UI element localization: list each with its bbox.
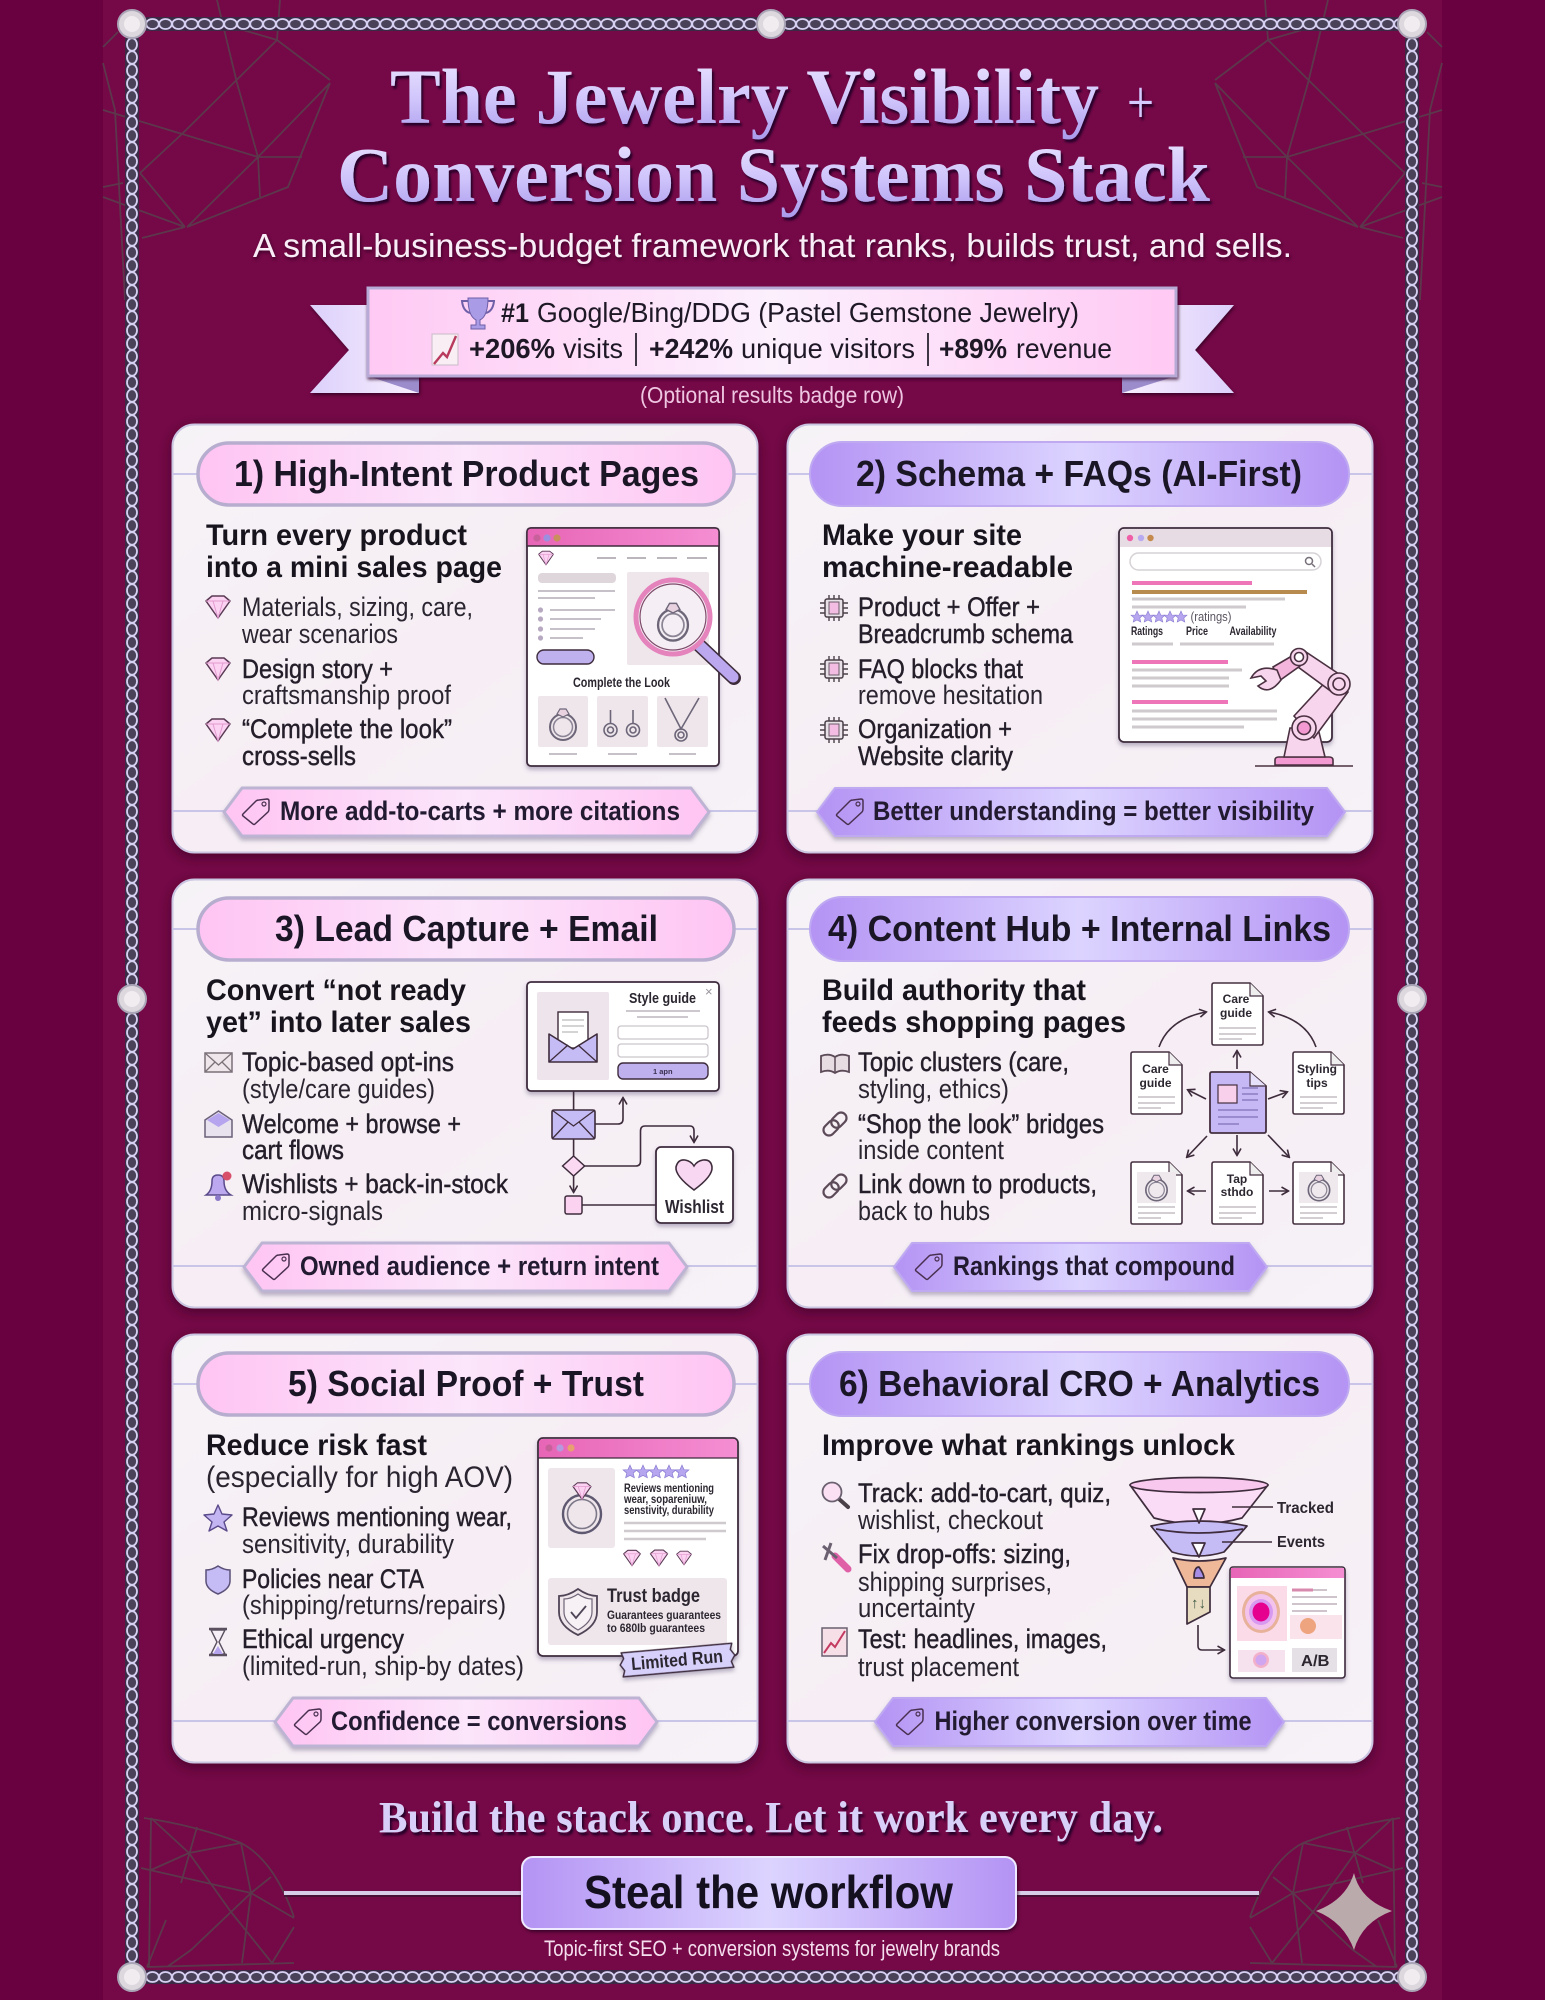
popup: 1 apn [653,1067,673,1076]
banner line 2: +89% [939,333,1007,364]
bullet list: Welcome + browse + [242,1109,461,1139]
illustration: search result with robot arm [1119,528,1353,766]
bullet list: back to hubs [858,1196,990,1226]
closing line: Build the stack once. Let it work every day. [379,1793,1163,1842]
left document [1131,1052,1182,1114]
left document: Care [1142,1062,1169,1076]
panel 4: Content Hub + Internal Links [787,880,1373,1308]
banner line 2 [469,333,1112,366]
subheading: into a mini sales page [206,551,502,584]
bullet list: cross-sells [242,741,356,771]
bullet list: Link down to products, [858,1169,1097,1199]
tagline: Topic-first SEO + conversion systems for jewelry brands [544,1936,1000,1961]
illustration: review page: wear, sopareniuw, [623,1492,707,1506]
icon: star [204,1505,232,1531]
heading pill [198,443,734,505]
subheading [822,974,1126,1039]
icon: open mail [205,1111,232,1137]
subheading [206,974,471,1039]
bullet list: (style/care guides) [242,1074,435,1104]
tag pill [894,1243,1267,1291]
banner line 1: Google/Bing/DDG (Pastel Gemstone Jewelry) [537,297,1079,328]
bullet list: wear scenarios [241,619,398,649]
tag pill [817,788,1345,836]
bullet list: “Shop the look” bridges [858,1109,1104,1139]
subtitle: A small-business-budget framework that ranks, builds trust, and sells. [253,227,1292,264]
subheading: Reduce risk fast [206,1429,427,1462]
button rules [284,1893,1259,1896]
illustration: search result with robot arm: Ratings [1131,626,1163,638]
panel 5: Social Proof + Trust [172,1334,758,1762]
bullet list: sensitivity, durability [242,1529,454,1559]
bullet list: Test: headlines, images, [858,1624,1107,1654]
icon: shield [206,1566,230,1594]
illustration: review page [538,1438,738,1677]
trust badge box: Guarantees guarantees [607,1610,721,1622]
gem facet pattern: bottom left [141,1818,294,1967]
heading pill [810,442,1349,506]
illustration: review page: senstivity, durability [624,1503,714,1517]
bullet list [206,592,473,771]
bullet list: shipping surprises, [858,1567,1052,1597]
funnel labels: Tracked [1277,1500,1334,1517]
illustration: funnel and heatmap: ↑↓ [1191,1595,1206,1612]
icon: mail [205,1053,232,1072]
subheading: yet” into later sales [206,1006,471,1039]
subheading: (especially for high AOV) [206,1461,513,1494]
bullet list: Topic clusters (care, [858,1047,1069,1077]
heading pill: 5) Social Proof + Trust [288,1363,644,1404]
bullet list: micro-signals [242,1196,383,1226]
heatmap browser [1230,1567,1345,1678]
decision diamond [563,1156,585,1176]
popup [527,982,719,1091]
left document: guide [1140,1076,1172,1090]
illustration: search result with robot arm: Availability [1230,626,1277,638]
results ribbon banner [310,288,1234,393]
gem facet pattern: top right [1215,0,1442,300]
bullet list: inside content [858,1135,1004,1165]
CTA button: Steal the workflow [584,1866,953,1918]
subheading: feeds shopping pages [822,1006,1126,1039]
panel 1: High-Intent Product Pages [172,424,758,852]
subheading [206,519,502,584]
icon: hourglass [209,1629,227,1655]
bullet list: Ethical urgency [242,1624,404,1654]
icon: magnifier [822,1482,848,1507]
heatmap browser: A/B [1301,1653,1330,1670]
bottom documents: sthdo [1221,1185,1253,1199]
bullet list: FAQ blocks that [858,654,1023,684]
bullet list: (limited-run, ship-by dates) [242,1651,524,1681]
bullet list [822,1478,1111,1682]
icon: trophy [462,298,494,329]
illustration: search result with robot arm: (ratings) [1190,610,1232,624]
tag pill: Rankings that compound [953,1251,1235,1281]
panel 2: Schema + FAQs [787,424,1373,852]
icon: tools [823,1543,848,1569]
subheading: Convert “not ready [206,974,467,1007]
top document: Care [1223,992,1250,1006]
bullet list [821,1047,1104,1226]
illustration: search result with robot arm: Price [1186,626,1208,638]
bottom documents [1131,1162,1344,1224]
icon: sparkle [1316,1873,1392,1950]
popup: Style guide [629,990,696,1007]
bullet list: styling, ethics) [858,1074,1009,1104]
heading pill [198,898,734,960]
link arrows [1159,1012,1316,1191]
tag pill [244,1243,687,1291]
tag pill: Better understanding = better visibility [873,796,1314,826]
ribbon tails [310,305,1234,393]
CTA button [522,1857,1016,1929]
banner line 2: unique visitors [741,333,915,364]
heading pill: 3) Lead Capture + Email [275,908,658,949]
bullet list: “Complete the look” [242,714,452,744]
bullet list [820,592,1074,771]
heading pill: 6) Behavioral CRO + Analytics [839,1363,1320,1404]
bullet list [204,1502,524,1681]
heading pill [198,1353,734,1415]
hub document [1210,1072,1266,1133]
tag pill [275,1698,657,1746]
bullet list: Website clarity [858,741,1013,771]
heading pill: 4) Content Hub + Internal Links [828,908,1331,949]
tag pill [224,788,709,836]
tag pill: Higher conversion over time [934,1706,1252,1736]
subheading: machine-readable [822,551,1073,584]
illustration: content hub diagram [1131,983,1344,1224]
limited run badge: Limited Run [630,1646,724,1674]
bullet list: uncertainty [858,1593,975,1623]
bullet list: trust placement [858,1652,1019,1682]
illustration: product page browser: Complete the Look [573,675,670,690]
heading pill: 2) Schema + FAQs (AI-First) [856,453,1302,494]
top document: guide [1220,1006,1252,1020]
ribbon main panel [368,288,1176,376]
right document: tips [1306,1076,1328,1090]
trust badge box [548,1578,727,1645]
illustration: opt-in popup and email flow [527,982,733,1223]
panel 6: Behavioral CRO + Analytics [787,1334,1373,1762]
bullet list: Breadcrumb schema [858,619,1074,649]
bullet list: Topic-based opt-ins [242,1047,454,1077]
title: The Jewelry Visibility [390,53,1099,140]
bullet list: Wishlists + back-in-stock [242,1169,508,1199]
top document [1212,983,1263,1045]
bullet list: Organization + [858,714,1012,744]
funnel [1130,1478,1268,1624]
subheading: Make your site [822,519,1022,552]
wishlist card: Wishlist [665,1197,724,1217]
trust badge box: Trust badge [607,1586,700,1607]
trust badge box: to 680Ib guarantees [607,1623,705,1635]
banner line 2: +242% [649,333,733,364]
banner line 2: +206% [469,333,555,364]
bullet list: remove hesitation [858,680,1043,710]
right document: Styling [1297,1062,1337,1076]
bullet list: Reviews mentioning wear, [242,1502,512,1532]
heading pill [810,1352,1349,1416]
robot arm [1251,648,1353,766]
title [337,53,1211,218]
bullet list: Fix drop-offs: sizing, [858,1539,1071,1569]
bullet list: Product + Offer + [858,592,1040,622]
bullet list: craftsmanship proof [242,680,451,710]
funnel labels [1222,1500,1334,1551]
title: + [1127,69,1154,137]
subheading: Improve what rankings unlock [822,1429,1236,1462]
bullet list: Design story + [242,654,393,684]
bullet list: Materials, sizing, care, [242,592,473,622]
envelope node [552,1110,595,1139]
icon: book [821,1055,849,1073]
icon: chart [822,1628,847,1656]
bullet list: wishlist, checkout [857,1505,1043,1535]
funnel labels: Events [1277,1534,1325,1551]
bullet list [205,1047,508,1226]
heading pill: 1) High-Intent Product Pages [234,453,699,494]
bullet list: cart flows [242,1135,344,1165]
panel 3: Lead Capture + Email [172,880,758,1308]
bullet list: (shipping/returns/repairs) [242,1590,506,1620]
illustration: product page browser [527,528,734,766]
popup: × [705,984,713,999]
gem facet pattern: top left [103,0,330,300]
flow connectors [574,1091,694,1205]
wishlist card [656,1147,733,1223]
step square [565,1196,582,1214]
illustration: review page: Reviews mentioning [624,1481,714,1495]
bullet list: Track: add-to-cart, quiz, [858,1478,1111,1508]
tag pill: Owned audience + return intent [300,1251,659,1281]
gem facet pattern: bottom right [1250,1818,1403,1967]
subheading: Build authority that [822,974,1086,1007]
banner line 1: #1 [501,298,529,328]
icon: chart [432,334,458,365]
badge row note: (Optional results badge row) [640,382,904,408]
subheading: Turn every product [206,519,467,552]
right document [1293,1052,1344,1114]
magnifier [636,580,734,678]
tag pill: Confidence = conversions [331,1706,627,1736]
bottom documents: Tap [1227,1172,1247,1186]
tag pill [875,1698,1284,1746]
heading pill [810,897,1349,961]
illustration: funnel and heatmap [1130,1478,1345,1678]
tag pill: More add-to-carts + more citations [280,796,680,826]
banner line 2: visits [563,333,623,364]
subheading [206,1429,513,1494]
banner line 2: revenue [1016,333,1112,364]
icon: bell [206,1172,232,1201]
subheading [822,519,1073,584]
title: Conversion Systems Stack [337,131,1211,218]
bullet list: Policies near CTA [242,1564,424,1594]
